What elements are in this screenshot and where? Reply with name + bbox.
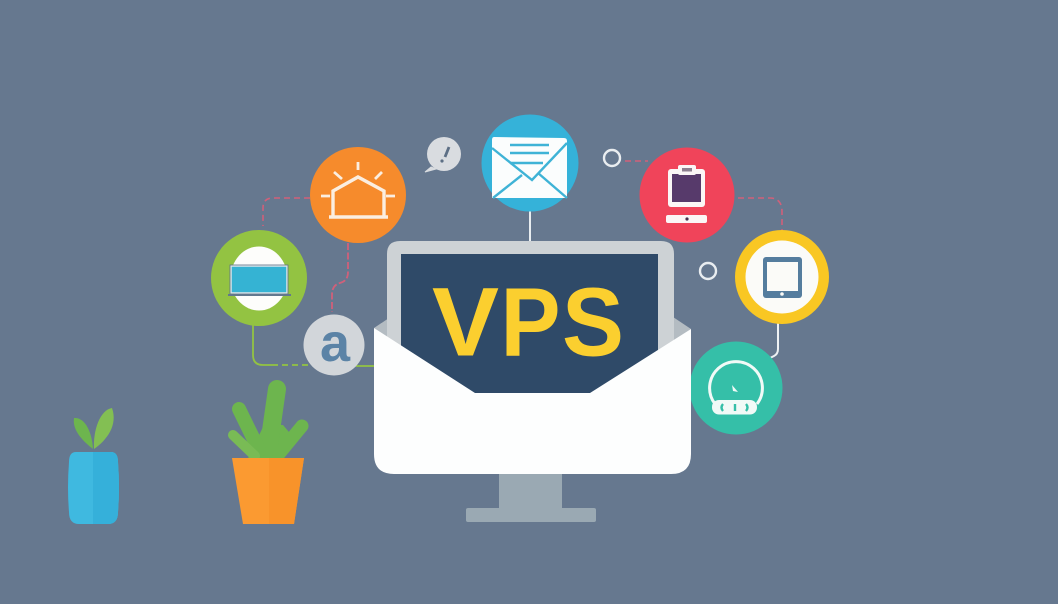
connector: mail to monitor: [529, 210, 531, 242]
orange pot shaded half: [269, 458, 304, 524]
icon: yellow tablet circle: [735, 230, 829, 324]
orange plant pot: [232, 389, 304, 524]
VPS heading: P: [500, 268, 560, 376]
monitor frame: [387, 241, 674, 400]
envelope back flap right: [670, 315, 691, 345]
VPS heading: V: [432, 268, 499, 376]
connector: orange to laptop: [263, 198, 310, 226]
VPS heading: S: [562, 268, 624, 376]
blue plant pot: [68, 408, 119, 524]
icon: teal gauge circle: [690, 342, 782, 434]
monitor base: [466, 508, 596, 522]
icon: orange house circle: [310, 147, 406, 243]
connector: red circle to tablet: [738, 198, 782, 230]
VPS heading: [432, 268, 624, 376]
connector: tablet to gauge: [768, 323, 778, 359]
connector: small ring to red circle: [625, 160, 648, 162]
decorative ring: lower: [700, 263, 716, 279]
envelope front: [374, 328, 691, 474]
envelope back flap left: [374, 316, 392, 345]
monitor screen: [401, 254, 658, 404]
icon: red clipboard circle: [640, 148, 734, 242]
blue pot leaves: [74, 408, 114, 449]
decorative ring: upper: [604, 150, 620, 166]
connector: orange to amazon badge: [332, 243, 348, 312]
icon: blue mail circle: [482, 114, 578, 212]
icon: amazon letter badge: [304, 313, 364, 376]
connector: laptop to envelope: [253, 325, 376, 366]
icon: amazon letter badge: a: [320, 313, 351, 373]
icon: green laptop circle: [211, 230, 307, 326]
blue pot shaded half: [93, 452, 119, 524]
succulent leaves: [233, 389, 302, 460]
monitor with VPS screen: [374, 241, 691, 522]
monitor stand: [499, 470, 562, 509]
blue pot body: [68, 452, 119, 524]
orange pot body: [232, 458, 304, 524]
icon: speech bubble: [425, 137, 461, 172]
